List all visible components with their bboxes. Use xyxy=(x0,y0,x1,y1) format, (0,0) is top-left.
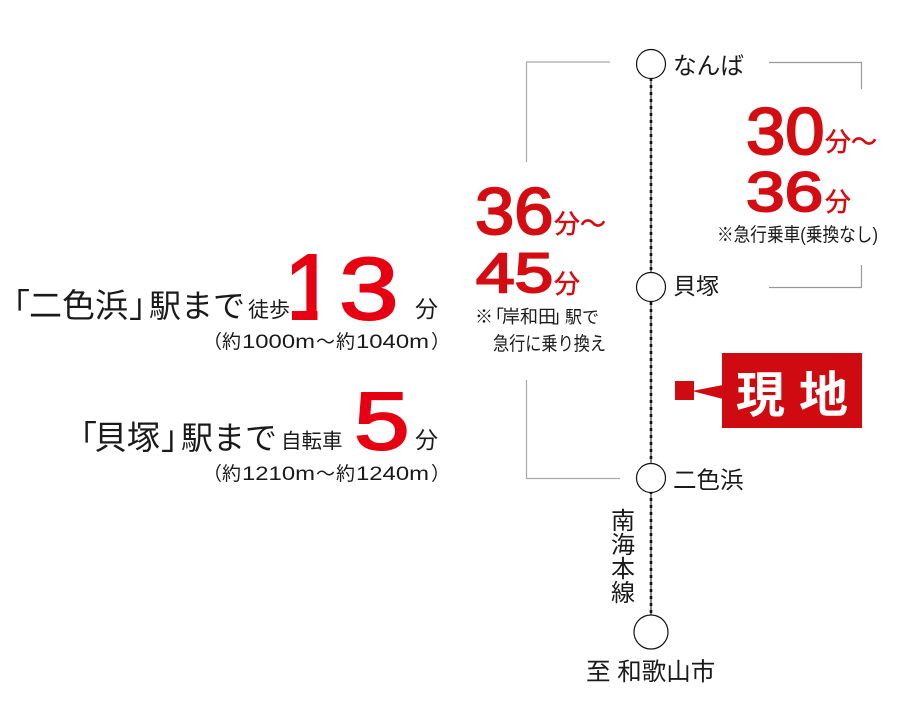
site marker: genchi callout xyxy=(675,353,862,428)
left bracket: Namba to Ninomihama xyxy=(526,62,620,478)
line name: Nankai Main Line: 海 xyxy=(611,532,635,559)
station name: Ninomihama: 二色浜 xyxy=(673,467,744,493)
travel time: Namba to Ninomihama: 分 xyxy=(554,269,580,299)
railway line xyxy=(650,78,652,632)
access: bicycle to Kaizuka station: 「 xyxy=(64,419,97,456)
travel time: Namba to Ninomihama xyxy=(475,175,606,355)
travel time: Namba to Kaizuka: ※急行乗車(乗換なし) xyxy=(717,224,878,246)
access: walk to Ninomihama station: 駅まで xyxy=(149,288,245,324)
travel time: Namba to Ninomihama: 岸和田 xyxy=(502,307,556,327)
line name: Nankai Main Line: 線 xyxy=(611,580,635,607)
access: bicycle to Kaizuka station: 駅まで xyxy=(181,420,277,456)
access: walk to Ninomihama station: （ xyxy=(203,331,222,353)
station name: Kaizuka: 貝塚 xyxy=(673,273,719,299)
station name: Namba: なんば xyxy=(673,53,744,80)
access: walk to Ninomihama station: 」 xyxy=(129,287,162,324)
access: walk to Ninomihama station: 約 xyxy=(336,331,355,353)
terminal marker: toward Wakayamashi xyxy=(634,615,668,649)
right bracket: Namba to Kaizuka xyxy=(769,62,862,288)
access: walk to Ninomihama station: 1 xyxy=(284,235,336,339)
travel time: Namba to Ninomihama: 45 xyxy=(476,242,553,304)
access: bicycle to Kaizuka station: ） xyxy=(431,463,450,485)
access: walk to Ninomihama station: 分 xyxy=(415,296,438,322)
access: walk to Ninomihama station: 1000m xyxy=(242,332,315,353)
travel time: Namba to Ninomihama: 」 xyxy=(552,307,570,327)
line name: Nankai Main Line: 南 xyxy=(611,508,635,535)
line name: Nankai Main Line xyxy=(611,508,635,607)
access: walk to Ninomihama station: 約 xyxy=(222,331,241,353)
travel time: Namba to Ninomihama: 36 xyxy=(475,175,554,248)
travel time: Namba to Kaizuka: 分 xyxy=(825,187,851,217)
access: bicycle to Kaizuka station: （ xyxy=(203,463,222,485)
station marker: Kaizuka xyxy=(636,272,666,302)
station marker: Ninomihama xyxy=(636,464,666,492)
access: bicycle to Kaizuka station: 約 xyxy=(336,463,355,485)
access: walk to Ninomihama station: 3 xyxy=(339,239,399,338)
travel time: Namba to Kaizuka: 36 xyxy=(746,161,823,223)
access: bicycle to Kaizuka station: 」 xyxy=(161,419,194,456)
travel time: Namba to Ninomihama: 「 xyxy=(486,307,504,327)
line name: Nankai Main Line: 本 xyxy=(611,556,635,583)
access: walk to Ninomihama station: ～ xyxy=(316,332,335,353)
access: walk to Ninomihama station: 1040m xyxy=(356,332,429,353)
travel time: Namba to Kaizuka: 30 xyxy=(746,95,825,168)
site marker: genchi callout: 現地 xyxy=(736,369,862,423)
travel time: Namba to Kaizuka: 分 xyxy=(825,127,851,157)
access: bicycle to Kaizuka station: 1240m xyxy=(356,464,429,485)
access: walk to Ninomihama station: ） xyxy=(431,331,450,353)
access: bicycle to Kaizuka station: 貝塚 xyxy=(94,419,160,456)
access: bicycle to Kaizuka station: 約 xyxy=(222,463,241,485)
travel time: Namba to Kaizuka xyxy=(717,95,878,246)
destination label: 至 和歌山市 xyxy=(586,658,715,686)
travel time: Namba to Ninomihama: ～ xyxy=(580,209,606,239)
travel time: Namba to Ninomihama: 駅で xyxy=(565,308,599,327)
travel time: Namba to Ninomihama: 急行に乗り換え xyxy=(493,333,606,355)
access: bicycle to Kaizuka station xyxy=(64,375,450,485)
travel time: Namba to Ninomihama: 分 xyxy=(554,209,580,239)
travel time: Namba to Kaizuka: ～ xyxy=(851,127,877,157)
access: bicycle to Kaizuka station: 自転車 xyxy=(281,430,342,453)
access: bicycle to Kaizuka station: 5 xyxy=(354,375,410,467)
access: walk to Ninomihama station xyxy=(18,254,438,350)
access: walk to Ninomihama station: 二色浜 xyxy=(29,287,128,324)
access: bicycle to Kaizuka station: 分 xyxy=(415,427,438,453)
access: walk to Ninomihama station: 徒歩 xyxy=(248,299,290,322)
travel time: Namba to Ninomihama: ※ xyxy=(475,307,493,327)
station marker: Namba xyxy=(636,50,666,78)
access: bicycle to Kaizuka station: 1210m xyxy=(242,464,315,485)
access: bicycle to Kaizuka station: ～ xyxy=(316,464,335,485)
